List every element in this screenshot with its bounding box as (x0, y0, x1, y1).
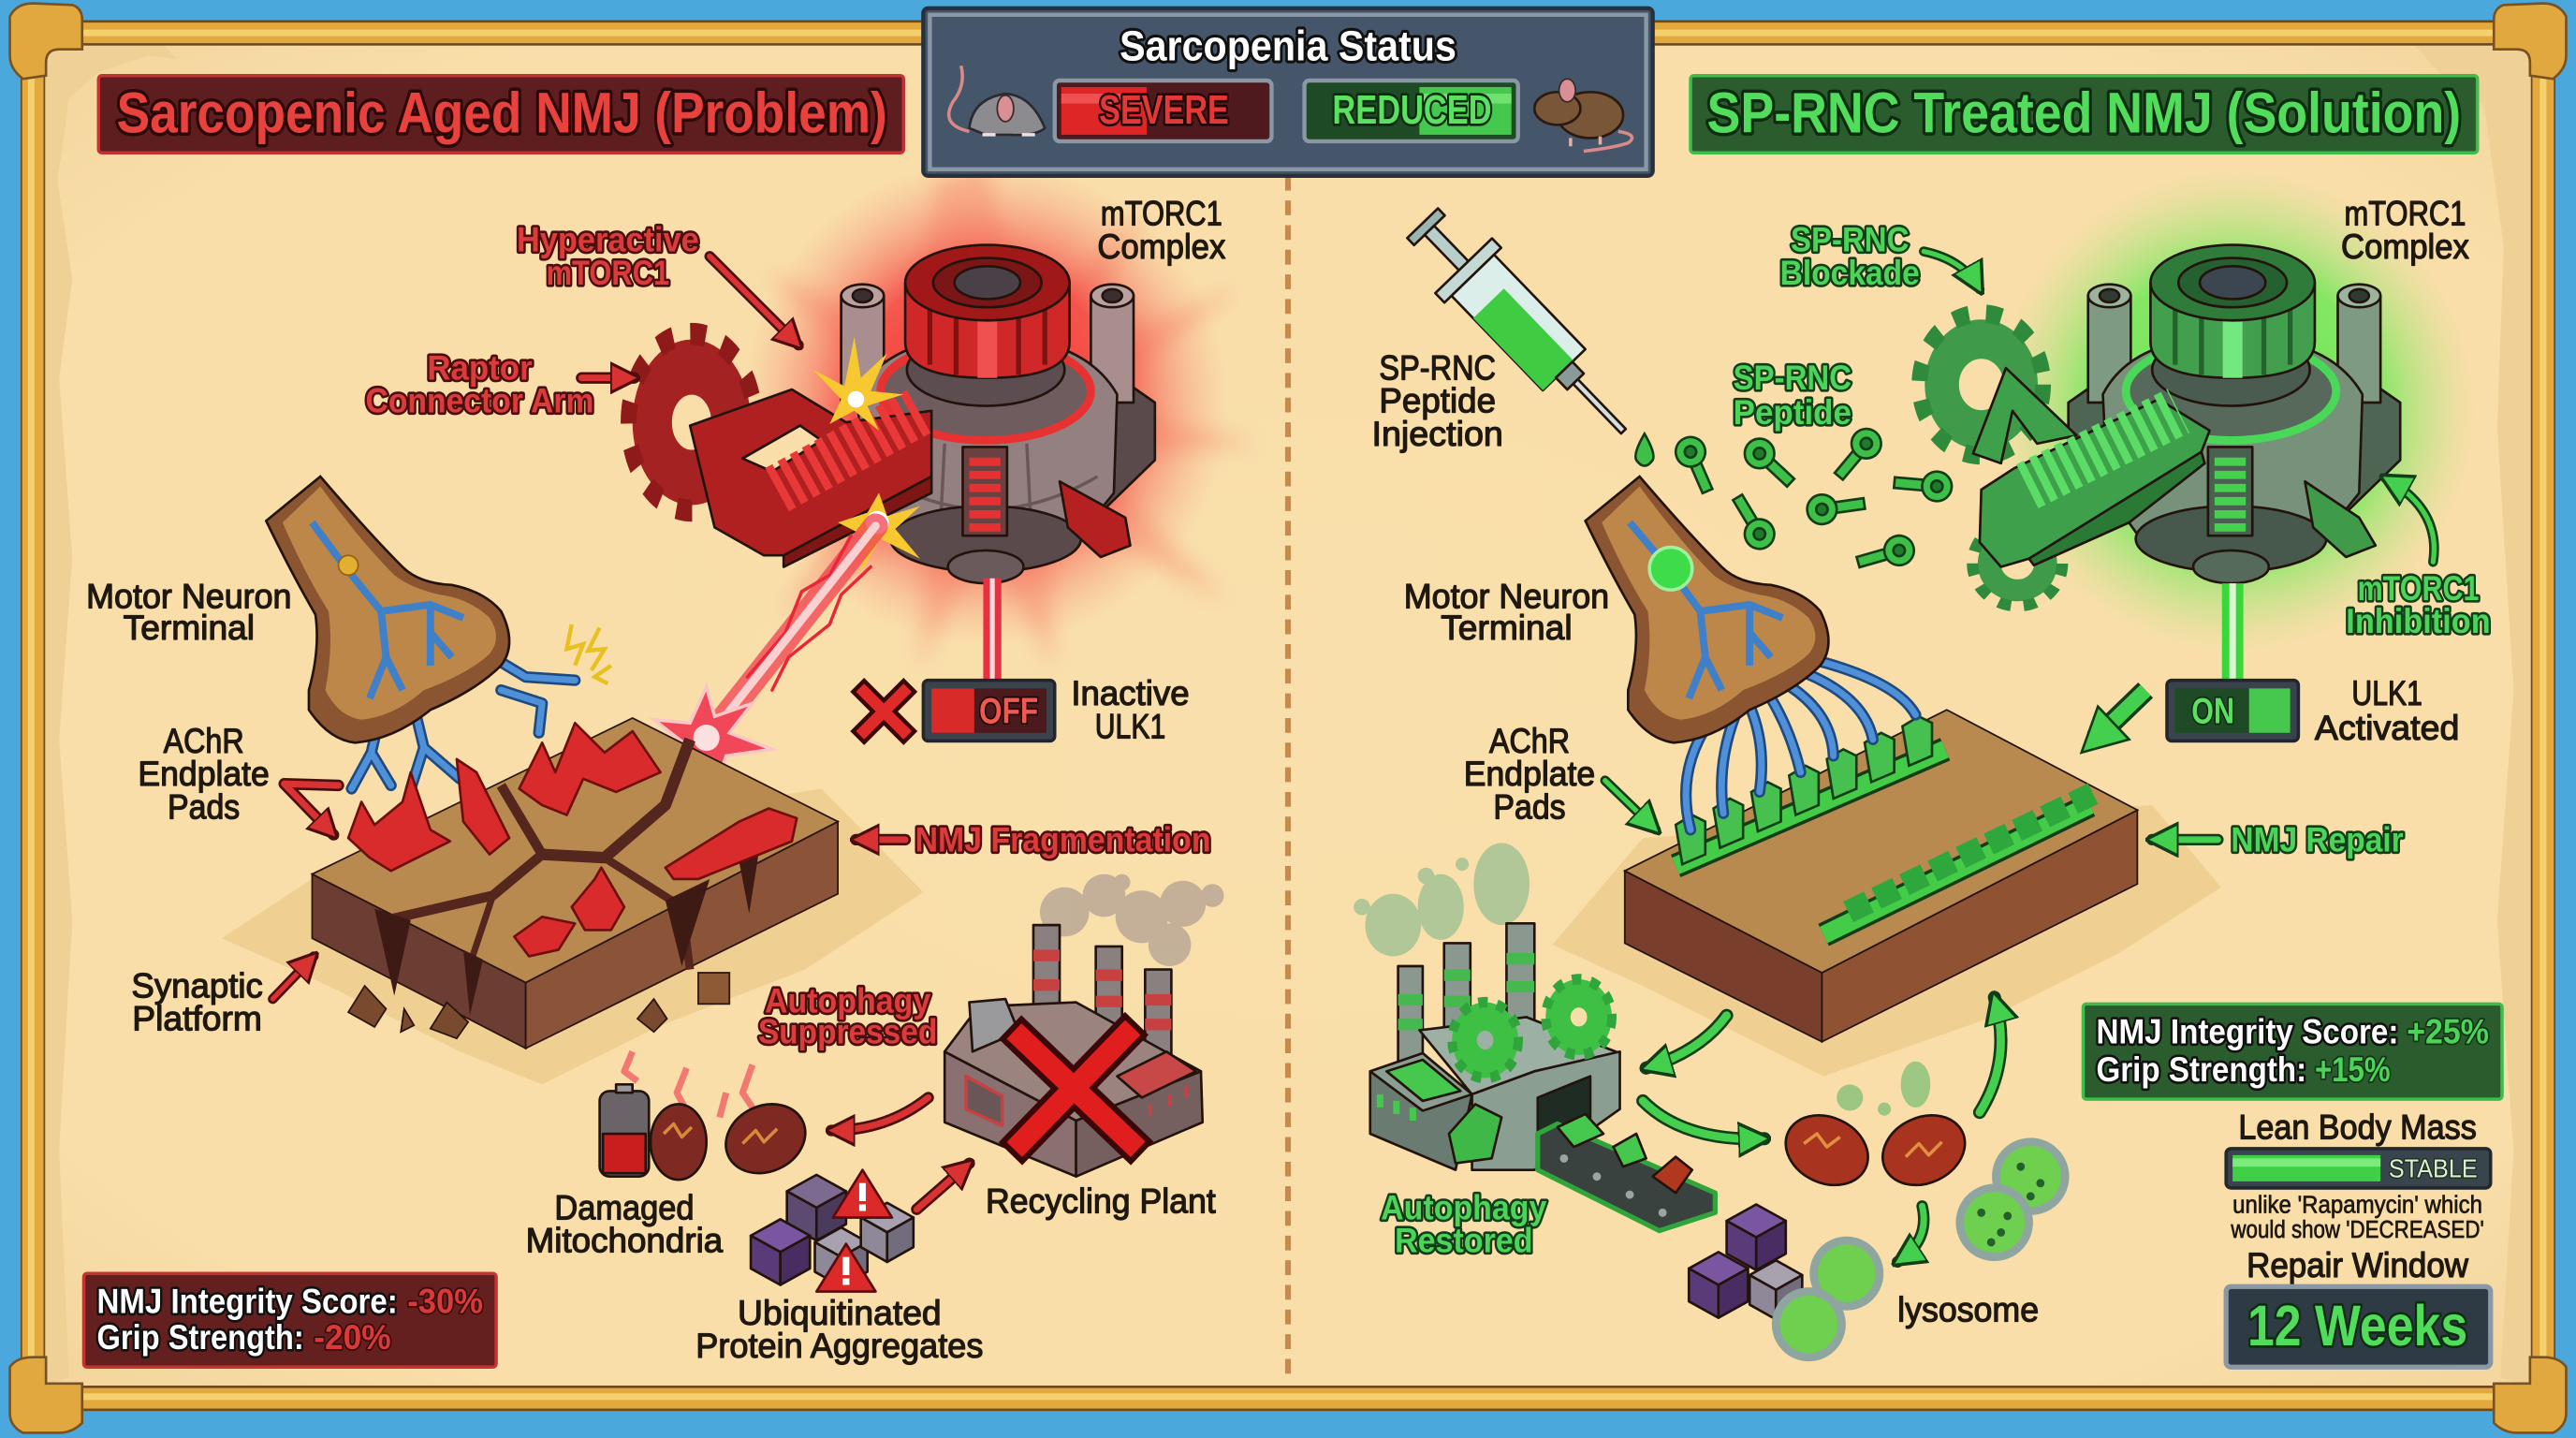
lean body mass gauge: STABLE (2389, 1153, 2478, 1182)
stats: solution: NMJ Integrity Score: (2097, 1013, 2398, 1051)
labels: right panel green: Inhibition (2346, 602, 2491, 640)
labels: left panel dark: Motor Neuron (86, 578, 292, 616)
sand shadow (1553, 805, 2221, 1077)
droplet (1635, 433, 1653, 466)
labels: left panel dark: Protein Aggregates (695, 1327, 983, 1365)
motor neuron terminal: right (1586, 477, 1828, 742)
syringe (1394, 196, 1652, 459)
arrow: platform to factory (1647, 1016, 1727, 1068)
labels: left panel red: mTORC1 (547, 254, 669, 292)
factory walls (944, 1051, 1076, 1177)
labels: right panel green: Blockade (1780, 254, 1920, 292)
panel: sarcopenia status (923, 8, 1653, 176)
red cap (905, 283, 1070, 378)
lean body mass gauge (2226, 1108, 2491, 1243)
raptor connector arm (690, 389, 931, 567)
corner ornament: bottom left (10, 1357, 82, 1432)
side tab (2305, 481, 2376, 557)
stats: problem (84, 1273, 496, 1367)
arrow: to lysosome stack (1897, 1206, 1924, 1262)
labels: left panel red: Connector Arm (366, 382, 593, 420)
back bracket (1101, 365, 1155, 513)
labels: right panel green (1381, 221, 2491, 1260)
heading: problem: Sarcopenic Aged NMJ (Problem) (117, 81, 887, 146)
smoke (1040, 874, 1224, 966)
sparks at arm joint (813, 337, 920, 572)
labels: left panel dark: Endplate (138, 755, 270, 793)
icon: grey mouse (949, 66, 1045, 135)
labels: right panel dark: Endplate (1464, 755, 1595, 793)
factory: recycling plant off (944, 874, 1224, 1177)
labels: left panel dark: mTORC1 (1101, 195, 1222, 233)
right side (1822, 810, 2137, 1042)
damaged mitochondria (600, 1051, 816, 1186)
green connector arm (1973, 368, 2210, 567)
labels: left panel dark: Recycling Plant (986, 1181, 1216, 1220)
repair window (2226, 1246, 2491, 1367)
big red cross (1022, 1035, 1131, 1142)
degraded aggregates with lysosomes (1689, 1204, 1880, 1357)
synaptic platform: fragmented (222, 718, 923, 1084)
labels: right panel dark: Activated (2315, 709, 2459, 747)
switch: ULK1 off: OFF (979, 691, 1038, 731)
green roof patch (1386, 1060, 1460, 1101)
arrow: factory to mitochondria (1643, 1101, 1764, 1139)
labels: left panel dark: Synaptic (131, 967, 263, 1005)
machine: hyperactive mTORC1 complex (842, 245, 1155, 583)
labels: right panel dark: lysosome (1897, 1290, 2039, 1328)
axons: damaged (352, 657, 575, 788)
arrows: endplate pads (285, 784, 339, 835)
stats: problem: -30% (407, 1283, 483, 1321)
arrow: hyperactive to machine (710, 257, 798, 345)
arrow: aggregates to plant (916, 1164, 970, 1210)
corner ornament: bottom right (2494, 1357, 2566, 1432)
green cap (2150, 283, 2315, 378)
labels: left panel red: Suppressed (758, 1013, 937, 1051)
synaptic platform: repaired (1553, 710, 2221, 1077)
side tab (1060, 481, 1131, 557)
labels: left panel dark: Platform (132, 1000, 262, 1038)
recovering mitochondria (1774, 1062, 1976, 1198)
switch: ULK1 on (2167, 681, 2298, 741)
labels: right panel green: NMJ Repair (2231, 820, 2404, 858)
rear roof (1419, 1017, 1620, 1094)
cracks (386, 740, 690, 970)
labels: right panel green: Autophagy (1381, 1189, 1547, 1227)
protein aggregates (751, 1170, 914, 1292)
arrow: endplate pads (1605, 781, 1656, 829)
centre divider (1286, 176, 1290, 1377)
cube right (861, 1203, 914, 1262)
warning sign lower (816, 1244, 875, 1292)
icon: brown mouse (1534, 79, 1632, 151)
back bracket (2346, 365, 2400, 513)
icon: red cross (864, 692, 903, 731)
cube centre (815, 1227, 868, 1286)
red energy beam (710, 526, 875, 736)
labels: right panel green: SP-RNC (1734, 359, 1852, 397)
labels: right panel dark: Terminal (1441, 609, 1573, 647)
cube left (1689, 1252, 1748, 1318)
cube left (751, 1219, 810, 1284)
labels: left panel red: NMJ Fragmentation (915, 820, 1211, 858)
switch: ULK1 on: ON (2191, 691, 2234, 731)
labels: right panel dark: Peptide (1379, 382, 1496, 420)
peptide keys (1671, 423, 1953, 577)
factory gear right (1545, 979, 1612, 1055)
labels: left panel dark: Mitochondria (526, 1222, 724, 1260)
conveyor belt (1538, 1114, 1715, 1231)
SP-RNC blocked gear top (1920, 314, 2043, 456)
stats: solution: +15% (2315, 1050, 2391, 1089)
labels: left panel dark: Pads (168, 787, 240, 826)
endplate pads: restored front row (1823, 794, 2093, 935)
labels: left panel dark (86, 195, 1226, 1365)
arrow: NMJ repair (2152, 836, 2217, 843)
damage spot (339, 555, 359, 575)
endplate pads: restored rear row (1676, 716, 1945, 866)
sand shadow (222, 788, 923, 1084)
labels: right panel dark: mTORC1 (2345, 195, 2466, 233)
glowing ring (2126, 342, 2336, 440)
left block (1370, 1053, 1472, 1170)
labels: right panel green: Peptide (1734, 393, 1852, 432)
windows (1380, 1094, 1412, 1121)
stats: problem: NMJ Integrity Score: (97, 1283, 398, 1321)
labels: left panel dark: Complex (1097, 227, 1226, 266)
rubble (348, 973, 729, 1038)
heading: solution: SP-RNC Treated NMJ (Solution) (1707, 81, 2461, 146)
green smoke (1354, 843, 1530, 956)
door wall (1472, 1051, 1620, 1170)
labels: right panel dark: Complex (2341, 227, 2469, 266)
corner ornament: top right (2494, 4, 2566, 79)
labels: right panel dark (1372, 195, 2469, 1328)
chimneys (1398, 923, 1534, 1078)
repair window: 12 Weeks (2247, 1294, 2467, 1358)
ULK1 signal beam (988, 579, 998, 681)
factory gear left (1452, 1003, 1518, 1078)
lean body mass gauge: would show 'DECREASED' (2231, 1215, 2484, 1243)
support posts (842, 285, 1134, 403)
labels: right panel dark: AChR (1489, 722, 1570, 760)
status panel with stripes (2208, 447, 2252, 536)
top face (1625, 710, 2137, 973)
labels: left panel dark: Inactive (1071, 674, 1190, 712)
arrow: fragmentation (856, 836, 905, 843)
housing (857, 337, 1117, 550)
lysosome upper (1814, 1240, 1880, 1306)
wisps (624, 1051, 759, 1117)
green side lump (1449, 1104, 1501, 1164)
lean body mass gauge: unlike 'Rapamycin' which (2232, 1190, 2482, 1218)
labels: left panel dark: Terminal (124, 609, 255, 647)
labels: left panel red: Raptor (427, 349, 533, 388)
labels: right panel dark: Motor Neuron (1404, 578, 1609, 616)
labels: left panel dark: Ubiquitinated (738, 1294, 942, 1332)
stats: solution: Grip Strength: (2097, 1050, 2306, 1089)
labels: right panel dark: Pads (1493, 787, 1566, 826)
right side (526, 822, 838, 1049)
lysosome lower (1776, 1292, 1841, 1357)
axons: healthy (1686, 661, 1915, 829)
labels: left panel red: Autophagy (765, 981, 931, 1020)
labels: right panel dark: ULK1 (2351, 674, 2422, 712)
mTORC1 green glow (1991, 168, 2478, 654)
labels: right panel green: mTORC1 (2358, 569, 2479, 608)
impact burst (654, 687, 772, 785)
arrow: plant to mitochondria (831, 1097, 929, 1131)
arrow: blockade (1924, 252, 1980, 289)
arrow: inhibition (2385, 478, 2434, 562)
peptides (1635, 423, 1953, 577)
labels: left panel dark: AChR (164, 722, 244, 760)
cube grey (1749, 1260, 1802, 1319)
status panel with stripes (962, 447, 1007, 536)
lysosomes pair (1960, 1142, 2065, 1257)
glowing node (1649, 547, 1692, 590)
warning sign upper (833, 1170, 892, 1218)
corner ornament: top left (10, 4, 82, 79)
stats: problem: -20% (314, 1318, 391, 1357)
arrow: mitochondria to platform (1980, 997, 2001, 1112)
reduced bar (1305, 81, 1518, 141)
labels: right panel green: SP-RNC (1791, 221, 1909, 259)
left side (1625, 871, 1822, 1042)
green signal beam (2227, 583, 2239, 681)
labels: left panel dark: ULK1 (1095, 707, 1165, 745)
motor neuron terminal: left (266, 477, 509, 742)
chimneys (1033, 925, 1171, 1068)
SP-RNC blocked gear bottom (1972, 521, 2062, 606)
labels: right panel dark: SP-RNC (1379, 349, 1496, 388)
labels: right panel dark: Injection (1372, 415, 1503, 453)
labels: right panel green: Restored (1395, 1222, 1533, 1260)
wall windows (966, 1077, 1186, 1125)
housing (2103, 337, 2363, 550)
machine: inhibited mTORC1 complex (2069, 245, 2400, 583)
stats: solution (2083, 1004, 2502, 1099)
labels: left panel red (366, 221, 1211, 1051)
support posts (2088, 285, 2380, 403)
raptor gear (629, 334, 754, 510)
left side (312, 874, 526, 1049)
icon: yellow sparks (567, 624, 611, 683)
stats: solution: +25% (2407, 1013, 2489, 1051)
empty battery (600, 1084, 649, 1177)
nerve branches (312, 522, 463, 698)
endplate pads: fragmented (348, 723, 797, 956)
status title: Sarcopenia Status (1120, 22, 1456, 70)
glowing ring (881, 342, 1090, 440)
mTORC1 red glow (742, 159, 1257, 666)
factory: autophagy restored (1354, 843, 1620, 1170)
arrow: ULK1 to platform (2082, 690, 2145, 753)
top face (312, 718, 838, 983)
labels: left panel dark: Damaged (554, 1189, 695, 1227)
reduced bar: REDUCED (1332, 87, 1492, 133)
stats: problem: Grip Strength: (97, 1318, 304, 1357)
labels: left panel red: Hyperactive (517, 221, 699, 259)
cube rear (787, 1175, 846, 1240)
cube rear (1727, 1204, 1786, 1270)
repair window: Repair Window (2247, 1246, 2468, 1284)
lean body mass gauge: Lean Body Mass (2238, 1108, 2477, 1147)
switch: ULK1 off (923, 681, 1055, 741)
arrow: raptor (581, 374, 634, 381)
arrow: synaptic platform (272, 956, 314, 999)
crack wedges on sides (374, 851, 759, 1016)
loading door (1538, 1077, 1590, 1153)
nerve branches (1630, 522, 1782, 698)
severe bar (1055, 81, 1271, 141)
severe bar: SEVERE (1099, 87, 1229, 133)
